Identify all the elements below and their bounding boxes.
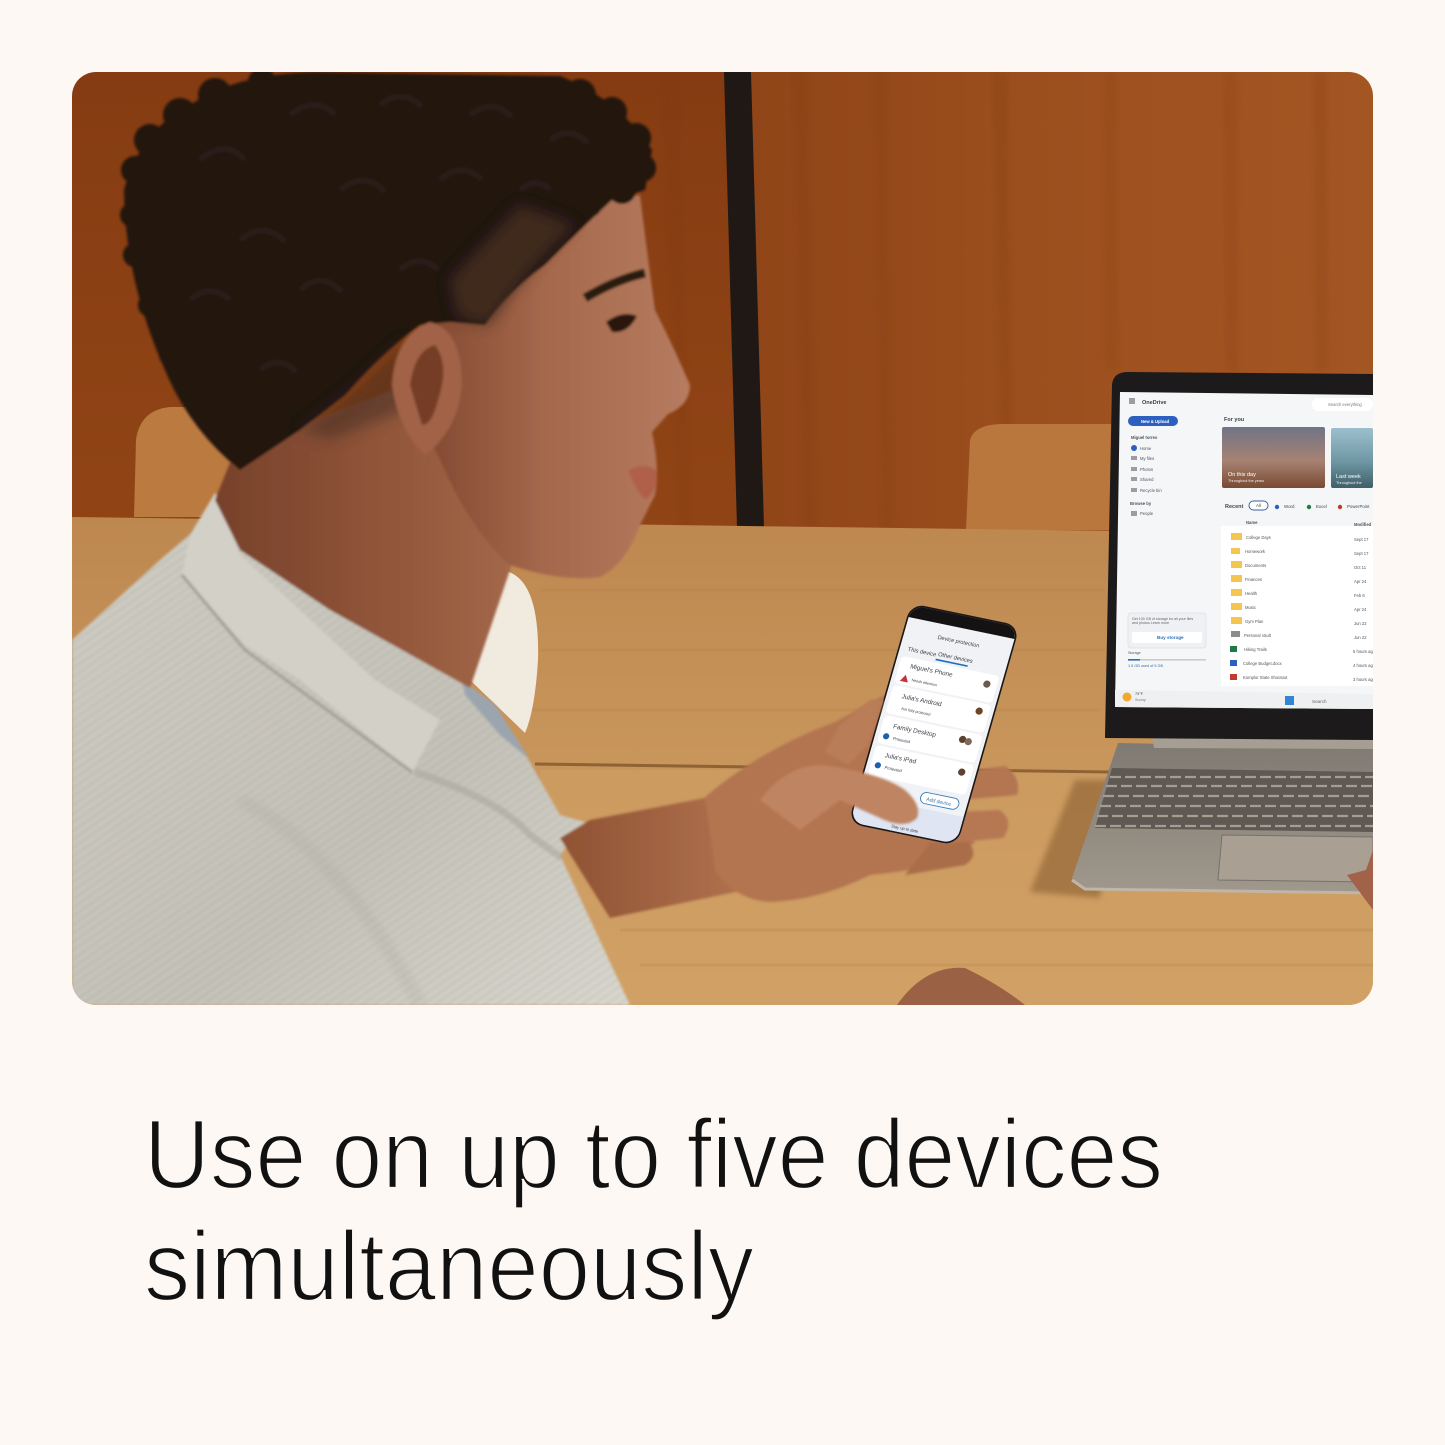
for you photos: For you xyxy=(1224,417,1244,423)
file list: Apr 24 xyxy=(1354,579,1367,584)
laptop lid xyxy=(1105,372,1373,740)
file list: Documents xyxy=(1245,563,1266,568)
lips xyxy=(628,466,657,500)
phone screen: Miguel's Phone xyxy=(909,663,954,679)
other hand at bottom edge xyxy=(897,968,1025,1005)
buy storage card xyxy=(1128,613,1206,668)
file list: Jun 22 xyxy=(1354,635,1367,640)
file list: Sept 17 xyxy=(1354,537,1369,542)
phone xyxy=(848,603,1020,846)
face xyxy=(400,195,690,578)
file list xyxy=(1230,520,1376,682)
recent filters: All xyxy=(1256,503,1261,508)
phone screen: Julia's iPad xyxy=(884,752,917,766)
phone screen: Protected xyxy=(892,736,911,744)
phone screen: Other devices xyxy=(937,652,973,665)
file list: Health xyxy=(1245,591,1258,596)
palm and fingers behind phone xyxy=(705,695,1018,902)
new and upload button: New & Upload xyxy=(1141,419,1170,424)
hair curl texture xyxy=(190,96,588,372)
sidebar: Browse by xyxy=(1130,501,1152,506)
thumb over phone xyxy=(760,700,918,830)
file list: Gym Plan xyxy=(1245,619,1264,624)
forearm xyxy=(560,770,760,918)
file list: Oct 11 xyxy=(1354,565,1367,570)
sidebar: People xyxy=(1140,511,1154,516)
file list: Modified xyxy=(1354,522,1372,527)
file list: Apr 24 xyxy=(1354,607,1367,612)
heading: Use on up to five devices xyxy=(144,1099,1163,1209)
buy storage card: Storage xyxy=(1128,651,1141,655)
file list: Hiking Trails xyxy=(1244,647,1267,652)
taskbar: Sunny xyxy=(1135,698,1146,702)
file list: Music xyxy=(1245,605,1256,610)
taskbar: Search xyxy=(1312,699,1327,704)
buy storage card: Buy storage xyxy=(1157,635,1184,640)
for you photos: Throughout the xyxy=(1336,481,1362,485)
file list: Jun 22 xyxy=(1354,621,1367,626)
temple fade xyxy=(450,205,575,325)
buy storage card: and photos Learn more xyxy=(1132,621,1169,625)
file list: 3 hours ago xyxy=(1353,677,1376,682)
phone screen: Device protection xyxy=(937,635,980,649)
chair right xyxy=(966,424,1115,530)
laptop hinge xyxy=(1152,738,1373,749)
recent filters: PowerPoint xyxy=(1347,504,1370,509)
buy storage card: Get 100 GB of storage for all your files xyxy=(1132,617,1193,621)
for you photos: Last week xyxy=(1336,474,1361,480)
neck xyxy=(215,380,530,688)
photo: man using phone and laptop xyxy=(72,68,1376,1005)
wooden table xyxy=(72,517,1373,1005)
laptop base and keyboard xyxy=(1072,743,1373,893)
new and upload button xyxy=(1128,416,1178,426)
curly hair xyxy=(120,68,656,470)
file list: Personal Vault xyxy=(1244,633,1272,638)
heading: simultaneously xyxy=(144,1211,754,1321)
phone screen: Not fully protected xyxy=(901,707,931,717)
for you photos: Throughout the years xyxy=(1228,479,1264,483)
laptop screen: OneDrive xyxy=(1115,392,1376,709)
laptop shadow on table xyxy=(1030,780,1110,898)
sidebar: My files xyxy=(1140,456,1154,461)
sidebar: Recycle bin xyxy=(1140,488,1162,493)
sidebar: Home xyxy=(1140,446,1152,451)
eye and brow xyxy=(585,273,645,332)
taskbar xyxy=(1115,690,1373,709)
header: OneDrive xyxy=(1142,400,1166,406)
sidebar: Miguel torres xyxy=(1131,435,1158,440)
shirt xyxy=(72,493,630,1005)
phone screen: Family Desktop xyxy=(892,723,937,739)
dark gap between wall panels xyxy=(724,72,764,528)
recent filters: Word xyxy=(1284,504,1295,509)
wood wall xyxy=(72,72,1373,542)
file list: Name xyxy=(1246,520,1258,525)
sidebar: Shared xyxy=(1140,477,1154,482)
buy storage card: 1.5 GB used of 5 GB xyxy=(1128,664,1164,668)
phone screen: Add device xyxy=(925,797,952,808)
man xyxy=(72,68,1018,1005)
recent filters: Recent xyxy=(1225,504,1244,510)
file list: 5 hours ago xyxy=(1353,649,1376,654)
phone screen xyxy=(850,605,1018,844)
sidebar xyxy=(1130,435,1162,516)
header xyxy=(1129,398,1373,411)
chair left xyxy=(134,407,240,517)
file list: 4 hours ago xyxy=(1353,663,1376,668)
ear xyxy=(392,322,462,455)
file list: Komplor State Shootout xyxy=(1243,675,1288,680)
for you photos xyxy=(1222,417,1373,488)
header: Search everything xyxy=(1328,402,1362,407)
recent filters: Excel xyxy=(1316,504,1327,509)
pale cushion behind man xyxy=(470,571,538,733)
file list: Sept 17 xyxy=(1354,551,1369,556)
file list: Homework xyxy=(1245,549,1266,554)
recent filters xyxy=(1225,501,1370,510)
phone screen: Stay up to date xyxy=(891,823,919,834)
file list: College Budget.docx xyxy=(1243,661,1283,666)
file list: Finances xyxy=(1245,577,1262,582)
heading xyxy=(144,1099,1163,1321)
phone screen: Protected xyxy=(884,765,903,773)
sidebar: Photos xyxy=(1140,467,1153,472)
phone screen: Needs attention xyxy=(911,678,937,687)
other person's hand, lower right xyxy=(1347,850,1373,910)
for you photos: On this day xyxy=(1228,472,1256,478)
phone screen: This device xyxy=(907,647,937,658)
file list: College Days xyxy=(1246,535,1271,540)
file list: Feb 6 xyxy=(1354,593,1365,598)
collar xyxy=(182,493,440,772)
phone screen: Julia's Android xyxy=(901,693,943,708)
laptop xyxy=(1072,372,1376,893)
taskbar: 79°F xyxy=(1135,692,1144,696)
